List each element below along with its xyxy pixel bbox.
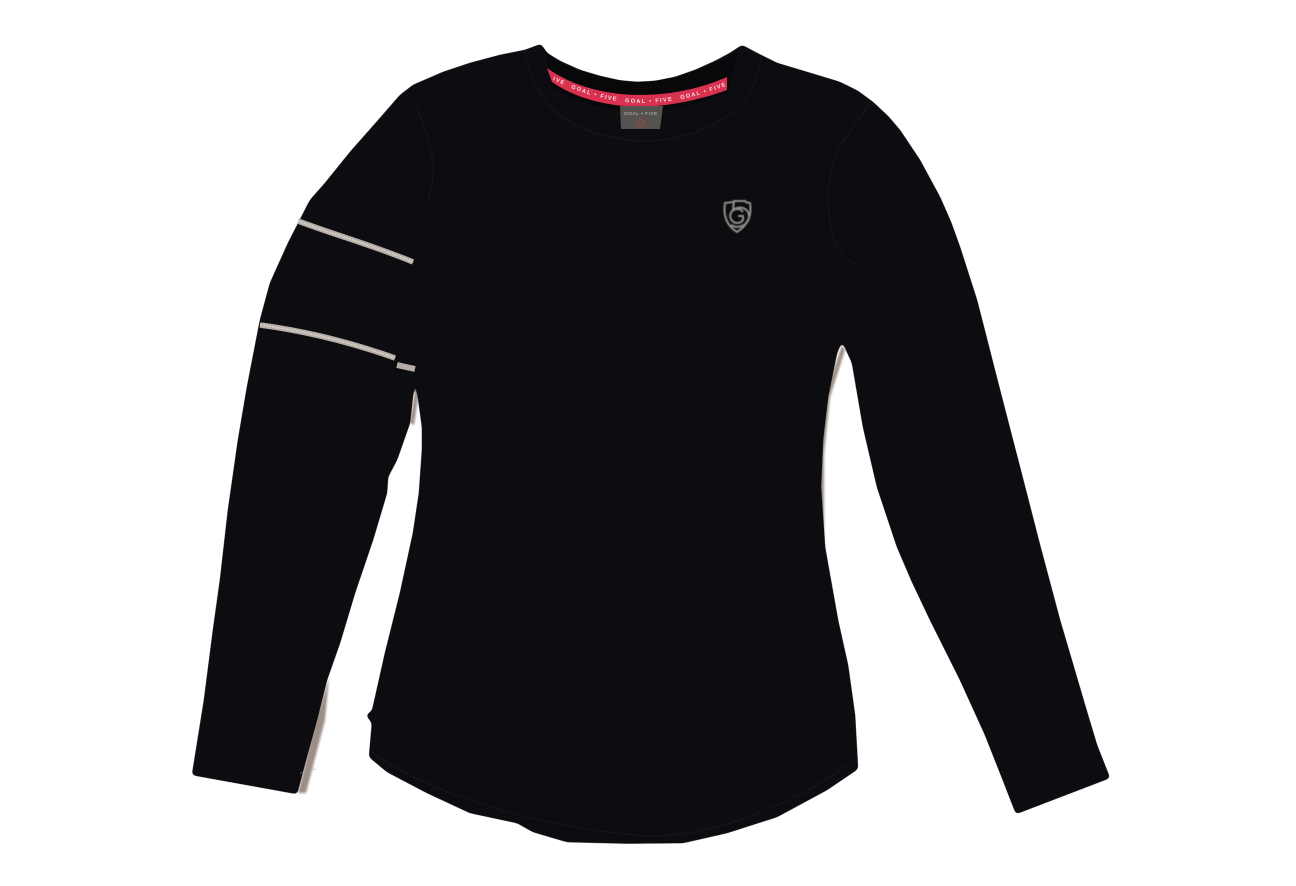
shirt body and sleeves bbox=[192, 44, 1110, 844]
numeral five bbox=[731, 201, 749, 227]
band text right: GOAL • FIVE bbox=[680, 82, 726, 99]
shield logo bbox=[724, 201, 750, 232]
tag brand: GOAL • FIVE bbox=[624, 111, 658, 116]
shirt silhouette bbox=[192, 44, 1110, 844]
collar seam and stitching bbox=[372, 50, 870, 836]
lower stripe bbox=[260, 325, 395, 358]
letter G ring bbox=[730, 209, 743, 223]
shield outline bbox=[724, 202, 750, 232]
lower stripe stitching bbox=[260, 325, 395, 358]
band ribbon bbox=[547, 68, 727, 107]
upper stripe bbox=[298, 221, 413, 262]
band text repeat: GOAL • FIVE bbox=[572, 85, 616, 101]
neck tag bbox=[620, 106, 663, 129]
collar inner back bbox=[546, 52, 737, 112]
upper stripe stitching bbox=[298, 221, 413, 262]
red neck band bbox=[547, 68, 727, 106]
sleeve shadow bbox=[298, 345, 845, 793]
stray thread bbox=[300, 769, 316, 774]
lower stripe end bbox=[397, 365, 415, 369]
band text center: GOAL • FIVE bbox=[625, 96, 672, 103]
band text left end: IVE bbox=[553, 76, 564, 84]
reflective stripes on sleeve bbox=[260, 221, 415, 369]
tag size ring bbox=[638, 120, 644, 126]
tag panel bbox=[620, 106, 663, 129]
